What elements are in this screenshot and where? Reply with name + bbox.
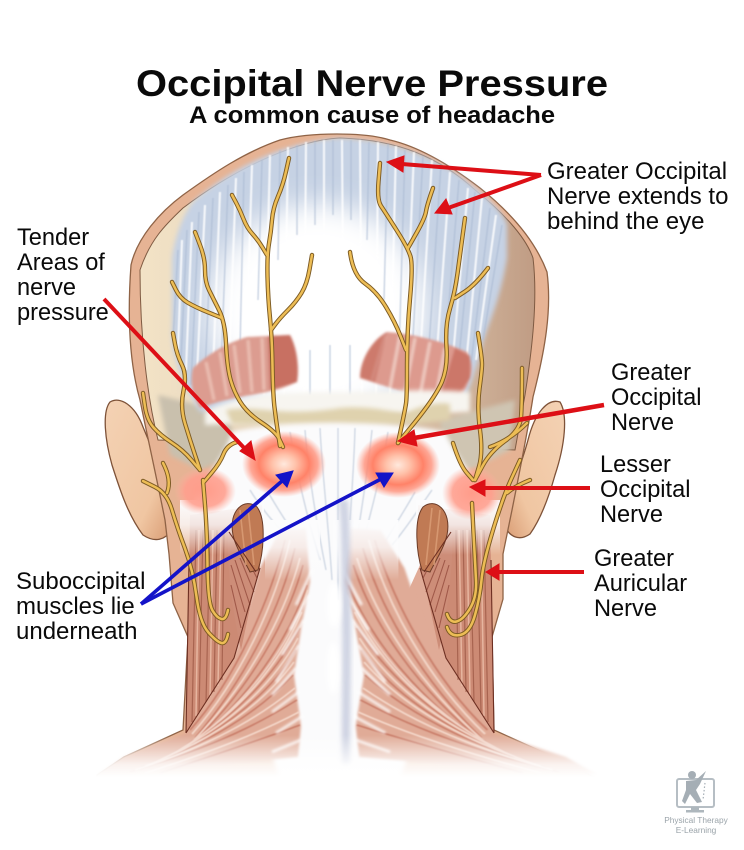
icon: right ear	[504, 401, 565, 538]
label: tender areas: pressure	[17, 300, 109, 326]
right deep neck muscles	[416, 500, 500, 733]
center neck line	[338, 500, 351, 765]
bottom fade	[60, 735, 660, 777]
icon: monitor with figure	[677, 771, 714, 812]
label: suboccipital muscles: underneath	[16, 618, 137, 645]
arrow: tender areas	[104, 299, 255, 460]
arrows: greater occipital nerve extends	[387, 156, 541, 214]
label: suboccipital muscles: muscles lie	[16, 593, 135, 620]
neck upper ligament area	[195, 423, 488, 780]
occipital muscle right	[360, 332, 472, 412]
label: lesser occipital nerve: Nerve	[600, 502, 663, 528]
scalp fibres	[178, 140, 496, 400]
icon: left ear	[105, 400, 172, 540]
label: lesser occipital nerve: Occipital	[600, 477, 690, 503]
right trapezius backing	[395, 565, 495, 755]
occipital muscle left	[192, 335, 298, 408]
logo: physical therapy e-learning	[664, 771, 729, 835]
label: tender areas: Areas of	[17, 250, 105, 276]
label: tender areas: Tender	[17, 225, 89, 251]
title: Occipital Nerve Pressure	[136, 63, 608, 104]
tender area: left centre glow	[242, 431, 326, 497]
label: tender areas: nerve	[17, 275, 76, 301]
label: greater occipital nerve extends: Nerve extends to	[547, 183, 728, 210]
scalp aponeurosis	[172, 138, 507, 412]
nerves core	[143, 158, 530, 643]
left deep neck muscles	[180, 500, 264, 733]
label: suboccipital muscles: Suboccipital	[16, 568, 145, 595]
tender area: right lateral glow	[442, 466, 502, 520]
scalp white centre	[210, 204, 426, 420]
label: lesser occipital nerve: Lesser	[600, 452, 671, 478]
label: greater occipital nerve extends: Greater Occipital	[547, 158, 727, 185]
neck fibres	[250, 428, 432, 600]
label: greater occipital nerve: Greater	[611, 360, 691, 386]
left trapezius muscle	[97, 520, 320, 775]
right trapezius muscle	[333, 520, 598, 775]
arrow: lesser occipital nerve	[470, 480, 590, 496]
arrow: greater occipital nerve	[398, 405, 604, 446]
label: greater occipital nerve: Nerve	[611, 410, 674, 436]
label: greater auricular nerve: Auricular	[594, 571, 687, 597]
tender area: right centre glow	[356, 432, 440, 498]
lower side tissue	[158, 395, 238, 470]
label: greater occipital nerve: Occipital	[611, 385, 701, 411]
illustration: back of head and neck	[60, 134, 660, 797]
logo text: E-Learning	[676, 825, 717, 835]
label: greater occipital nerve extends: behind the eye	[547, 208, 704, 235]
nerves outline	[143, 158, 530, 643]
label: greater auricular nerve: Nerve	[594, 596, 657, 622]
subtitle: A common cause of headache	[189, 102, 555, 129]
skull inner area	[140, 138, 535, 450]
head and neck skin	[97, 134, 610, 785]
arrow: greater auricular nerve	[486, 564, 584, 580]
white fringe above bone band	[205, 390, 470, 425]
arrows: suboccipital muscles	[141, 471, 393, 604]
tender area: left lateral glow	[174, 467, 236, 515]
logo text: Physical Therapy	[664, 815, 729, 825]
bottom cover	[60, 777, 660, 797]
bone band	[226, 403, 450, 426]
label: greater auricular nerve: Greater	[594, 546, 674, 572]
